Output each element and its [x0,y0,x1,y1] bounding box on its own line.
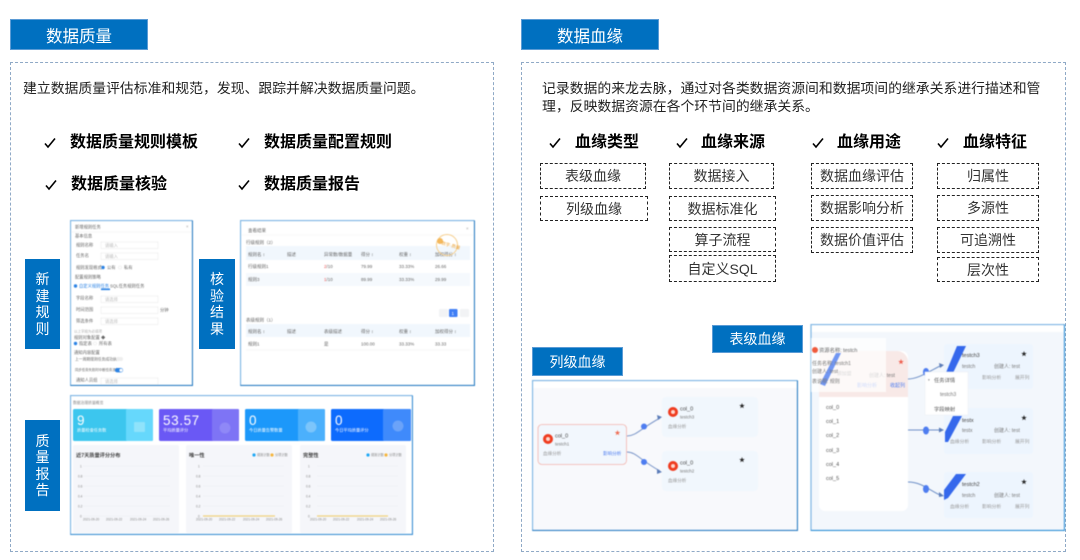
chart: 近7天质量评分分布: 0.4 [78,494,83,498]
chart: 完整性: 分项计数 [389,452,403,457]
node: col_0 testch3: col_0 [680,406,693,412]
screenshot: verification results: 是 [324,342,329,348]
node: col_0 testch1: ★ [614,430,621,437]
heading: 数据血缘 [521,19,659,50]
screenshot: new rule form: 所有表 [99,340,113,347]
label: 列级血缘 [532,347,623,376]
screenshot: verification results: 规则名 ↕ [248,251,265,258]
tag: 归属性 [937,163,1039,189]
stat card: 质量检查任务数: 9 [77,413,85,428]
checklist item: 数据质量报告: 数据质量报告 [264,176,360,193]
screenshot: verification results: 33.33% [399,277,414,282]
node: testx: 影响分析 [982,438,1001,445]
screenshot: new rule form: 自定义规则任务 [79,282,110,290]
tag: 数据价值评估 [811,227,913,253]
popup menu: task details: ▾ [928,378,930,382]
chart: 完整性: 完整性 [303,451,319,459]
node: testx: testx [962,428,973,434]
node: testch2: 血缘分析 [950,503,969,510]
node: col_0 testch2: 血缘分析 [668,477,687,484]
label: 新建规则 [25,259,60,349]
panel: 数据血缘 [521,62,1066,552]
node: testch2: 展开列 [1015,503,1030,510]
chart: 近7天质量评分分布: 0.8 [78,474,83,478]
edge: to testch2 [627,452,662,474]
popup menu: task details: testch3 [940,392,956,398]
tag: 可追溯性 [937,227,1039,253]
node: source table with columns: ★ [898,359,904,366]
chart: 近7天质量评分分布: 2021-09-24 [130,518,147,522]
tag: 数据标准化 [669,196,776,221]
chart: 唯一性: 2021-09-24 [243,518,260,522]
node: testch3: 创建人: test [994,363,1020,370]
screenshot: new rule form: 上一周期规则任务成功执行 [75,356,121,362]
tag: 数据接入 [669,163,774,189]
node: testch2: 创建人: test [994,492,1020,499]
popup menu: task details [925,372,968,415]
screenshot: verification results: 1 [452,311,454,316]
screenshot: verification results: 规则3 [248,276,260,283]
screenshot: new rule form: 同步任务失败时中断任务流程 [75,367,120,372]
chart: 近7天质量评分分布: 0 [80,514,82,518]
screenshot: new rule form: 请选择 [105,296,119,303]
chart: 完整性: 2021-09-24 [357,518,374,522]
screenshot: new rule form: SQL任务规则任务 [110,282,145,290]
node: source table with columns: col_4 [826,462,839,468]
chart: 近7天质量评分分布: 0.2 [78,504,83,508]
tag: 多源性: 多源性 [967,200,1009,216]
text: data lineage description: 记录数据的来龙去脉，通过对各类数据资源间和数据项间的继承关系进行描述和管 [542,80,1040,96]
tag: 表级血缘: 表级血缘 [565,168,621,184]
node: col_0 testch3: ★ [739,403,745,410]
screenshot: verification results: 表级描述 [324,328,342,335]
chart: 近7天质量评分分布: 近7天质量评分分布 [76,451,120,459]
node: col_0 testch2: ★ [739,457,745,464]
tag: 可追溯性: 可追溯性 [960,232,1016,248]
screenshot: new rule form: 规则对象配置 ◆ [74,334,106,341]
node: col_0 testch1: 血缘分析 [543,450,562,457]
tag: 算子流程 [669,227,776,252]
chart: 唯一性: 1 [198,464,200,468]
screenshot: verification results: 100.00 [361,342,375,346]
stat card: 今日质量告警数量: 0 [249,413,257,428]
tag: 多源性 [937,195,1039,221]
screenshot: verification results: 33.33 [435,342,447,346]
label: 质量报告: 质量报告 [36,432,50,498]
node: testch2 [944,472,1033,518]
chart: 近7天质量评分分布: 1 [80,464,82,468]
node: testch3: testch [962,364,976,370]
stat card: 今日质量告警数量: 今日质量告警数量 [249,426,283,434]
screenshot: verification results [239,219,476,387]
screenshot: verification results: 行级规则1 [248,263,269,270]
label: 核验结果: 核验结果 [210,271,224,336]
screenshot: new rule form: 私有 [124,264,133,271]
tooltip: resource details [811,338,886,392]
column: 血缘类型 [540,133,648,221]
node: testch2: ★ [1021,479,1027,486]
chart: 完整性: 2021-09-20 [310,518,327,522]
chart: 完整性: 2021-09-26 [380,518,397,522]
screenshot: new rule form: 规则名称 [76,242,94,248]
node: source table with columns: col_1 [826,419,839,425]
screenshot: new rule form: 通知人员组 [76,376,98,384]
screenshot: new rule form: 配置规则策略 [75,274,101,280]
chart: 唯一性: 0.2 [196,504,201,508]
screenshot: verification results: 33.33% [399,342,414,346]
chart: 唯一性: 分项计数 [275,452,289,457]
node: testch3 [944,344,1033,389]
tag: 自定义SQL: 自定义SQL [687,260,758,276]
label: 表级血缘 [712,325,803,353]
chart: 唯一性: 2021-09-20 [196,518,213,522]
node: col_0 testch2: testch2 [680,468,695,474]
column heading [676,133,765,151]
column heading [938,133,1027,151]
popup menu: task details: 任务详情 [934,376,956,384]
column heading: 血缘来源 [701,134,765,151]
tag: 算子流程: 算子流程 [694,232,750,248]
chart: 近7天质量评分分布: 2021-09-22 [106,518,123,522]
screenshot: verification results: 数字·质量 [440,240,462,252]
screenshot: verification results: 1/10 [324,277,333,282]
stat card: 今日平均质量评分: 0 [335,413,343,428]
tag: 层次性 [937,257,1039,282]
screenshot: new rule form: 请输入 [105,253,119,260]
panel: 数据质量 [10,62,494,552]
stat card: 今日质量告警数量 [245,409,325,441]
column heading [550,133,639,151]
screenshot: new rule form: 分钟 [160,306,169,314]
node: source table with columns: 源加盟 [837,370,852,377]
chart: 唯一性: 0.4 [196,494,201,498]
label: 核验结果 [199,259,235,349]
column: 血缘特征 [937,133,1039,282]
screenshot: verification results: 加权得分 ↕ [435,251,456,258]
label: 列级血缘: 列级血缘 [550,354,606,370]
screenshot: new rule form: 指定表 [79,340,93,347]
node: col_0 testch3: 血缘分析 [668,423,687,430]
screenshot: verification results: × [466,226,469,231]
node: col_0 testch3: testch3 [680,414,695,420]
chart: 完整性: 规则计数 [371,452,385,457]
screenshot: new rule form [69,219,194,387]
diagram: table-level lineage [810,323,1066,532]
screenshot: new rule form: 新增规则任务 [75,224,101,230]
column heading: 血缘用途 [837,134,901,151]
node: testch2: 影响分析 [982,503,1001,510]
stat card: 质量检查任务数: 质量检查任务数 [77,426,107,434]
screenshot: verification results: 得分 ↕ [361,251,374,258]
text: data quality description: 建立数据质量评估标准和规范，发现、跟踪并解决数据质量问题。 [23,80,424,96]
chart: 唯一性: 规则计数 [257,452,271,457]
stat card: 平均质量评分: 53.57 [163,413,200,428]
edges [908,363,944,497]
screenshot: verification results: 描述 [287,328,296,335]
node: testch3: 展开列 [1015,374,1030,381]
screenshot: verification results: 89.99 [361,277,373,282]
tag: 列级血缘: 列级血缘 [566,200,622,216]
stat card: 平均质量评分 [159,409,239,441]
diagram: column-level lineage [531,379,799,532]
stat card: 今日平均质量评分 [331,409,411,441]
screenshot: verification results: 表级规则（1） [246,316,276,324]
screenshot: verification results: 规则名 ↕ [248,328,265,335]
tooltip: resource details: 资源名称: testch [819,346,857,354]
tooltip: resource details: 创建人: test [812,368,838,375]
tag: 数据血缘评估: 数据血缘评估 [820,168,904,184]
screenshot: new rule form: 通知内容配置 [74,349,100,356]
checklist item: 数据质量核验: 数据质量核验 [71,176,167,193]
label: 新建规则: 新建规则 [36,271,50,336]
column: 血缘用途 [811,133,913,253]
chart: 唯一性: 0.8 [196,474,201,478]
screenshot: quality report dashboard [69,394,414,536]
chart: 完整性: 0.8 [306,474,311,478]
node: source table with columns: col_3 [826,448,839,454]
stat card: 质量检查任务数 [73,409,153,441]
node: col_0 testch2: col_0 [680,460,693,466]
node: source table with columns: 影响分析 [857,382,877,389]
node: testch2: testch2 [962,482,980,488]
screenshot: new rule form: 任务名 [76,252,89,259]
node: testx [944,408,1033,454]
popup menu: task details: 字段映射 [934,405,956,413]
screenshot: verification results: 规则1 [248,340,260,348]
tag: 数据接入: 数据接入 [694,168,750,184]
text: data lineage description: 理，反映数据资源在各个环节间的继承关系。 [542,98,819,114]
screenshot: verification results: 79.99 [361,264,373,269]
chart: 完整性: 0.6 [306,484,311,488]
node: source table with columns [819,351,908,511]
screenshot: new rule form: 公有 [107,264,116,271]
chart: 近7天质量评分分布 [73,445,179,533]
screenshot: verification results: 26.66 [435,264,447,269]
node: col_0 testch1: 影响分析 [603,450,622,457]
node: testx: ★ [1021,415,1027,422]
screenshot: verification results: 权重 ↕ [399,251,412,258]
screenshot: verification results: 查看结果 [248,227,266,234]
chart: 完整性: 2021-09-22 [333,518,350,522]
chart: 唯一性: 2021-09-26 [266,518,283,522]
chart: 唯一性: 0 [198,514,200,518]
screenshot: new rule form: × [186,224,189,229]
screenshot: verification results: 行级规则（2） [246,239,276,246]
node: col_0 testch1: col_0 [555,434,568,440]
chart: 完整性 [300,445,406,533]
tooltip: resource details: 任务名称: testch1 [812,360,851,367]
tag: 数据影响分析: 数据影响分析 [820,200,904,216]
screenshot: new rule form: 基本信息 [75,232,93,240]
tag: 数据血缘评估 [811,163,913,189]
chart: 完整性: 0.2 [306,504,311,508]
column heading: 血缘特征 [963,134,1027,151]
chart: 完整性: 0 [308,514,310,518]
screenshot: new rule form: 以上字段为必填项 [74,328,102,334]
screenshot: verification results: 异常数/数据量 [324,251,353,258]
screenshot: new rule form: 请选择 [105,318,119,325]
chart: 唯一性 [186,445,292,533]
tag: 数据价值评估: 数据价值评估 [820,232,904,248]
node: testx: 展开列 [1015,438,1030,445]
stat card: 平均质量评分: 平均质量评分 [163,426,189,434]
stat card: 今日平均质量评分: 今日平均质量评分 [335,426,369,434]
tag: 归属性: 归属性 [967,168,1009,184]
label: 质量报告 [25,420,60,511]
screenshot: verification results: 2/10 [324,264,333,269]
tag: 列级血缘 [540,196,648,221]
node: source table with columns: col_2 [826,433,839,439]
screenshot: verification results: 权重 ↕ [399,328,412,335]
heading: 数据血缘: 数据血缘 [557,28,623,46]
node: testch3: testch3 [962,353,980,359]
node: source table with columns: 收起列 [890,382,905,389]
chart: 唯一性: 2021-09-22 [219,518,236,522]
tooltip: resource details: 表说明: 规则 [812,378,840,385]
screenshot: new rule form: 请选择 [105,378,119,385]
screenshot: new rule form: 时间范围 [76,306,93,313]
tag: 自定义SQL [669,255,776,282]
screenshot: verification results: 33.33% [399,264,414,269]
chart: 近7天质量评分分布: 0.6 [78,484,83,488]
text: data lineage description [542,80,1040,114]
screenshot: new rule form: 请输入 [105,242,119,249]
screenshot: new rule form: 筛选条件 [76,318,94,324]
screenshot: verification results: 得分 ↕ [361,328,374,335]
screenshot: new rule form: 规则发现格式 [76,264,102,271]
screenshot: new rule form: 字段名称 [76,294,94,302]
column heading [812,133,901,151]
chart: 唯一性: 唯一性 [189,451,205,459]
node: col_0 testch2 [662,451,758,491]
heading: 数据质量 [10,19,148,50]
node: testch2: testch [962,493,976,499]
screenshot: quality report dashboard: 数据治理质量概览 [73,400,104,405]
chart: 唯一性: 0.6 [196,484,201,488]
heading: 数据质量: 数据质量 [46,28,112,46]
node: col_0 testch3 [662,397,758,437]
column: 血缘来源 [669,133,776,282]
edge: to testch3 [627,415,662,436]
node: source table with columns: col_0 [826,405,839,411]
checklist item: 数据质量配置规则: 数据质量配置规则 [264,134,392,151]
tag: 数据标准化: 数据标准化 [688,200,758,216]
node: testch3: 影响分析 [982,374,1001,381]
node: col_0 testch1: testch1 [555,442,570,446]
column heading: 血缘类型 [575,134,639,151]
tag: 表级血缘 [540,163,646,189]
chart: 完整性: 1 [308,464,310,468]
node: testx: 血缘分析 [950,438,969,445]
node: testx: testx [962,418,974,424]
node: testch3: ★ [1021,351,1027,358]
tag: 数据影响分析 [811,195,913,221]
node: testx: 创建人: test [994,427,1020,434]
chart: 近7天质量评分分布: 2021-09-20 [83,518,100,522]
screenshot: verification results: 29.99 [435,277,447,282]
screenshot: verification results: 描述 [287,251,296,258]
node: source table with columns: 创建人: test [869,372,895,379]
label: 表级血缘: 表级血缘 [730,331,786,347]
node: col_0 testch1 [538,424,626,464]
screenshot: verification results: 加权得分 ↕ [435,328,456,335]
tag: 层次性: 层次性 [967,262,1009,278]
chart: 完整性: 0.4 [306,494,311,498]
checklist item: 数据质量规则模板: 数据质量规则模板 [70,134,198,151]
chart: 近7天质量评分分布: 2021-09-26 [153,518,170,522]
node: source table with columns: col_5 [826,476,839,482]
